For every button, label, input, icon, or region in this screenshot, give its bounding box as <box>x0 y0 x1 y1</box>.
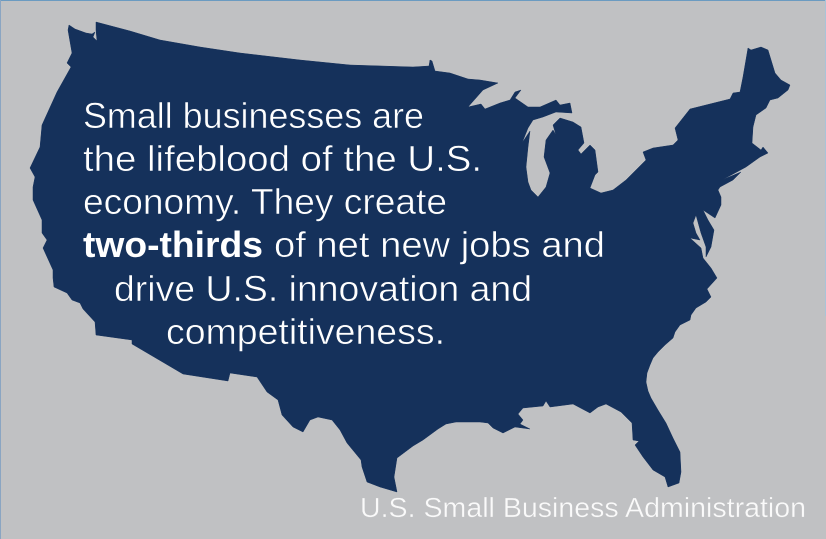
text block: main statement: the lifeblood of the U.S. <box>83 138 482 179</box>
text block: main statement: economy. They create <box>83 181 447 222</box>
text block: main statement <box>83 95 605 352</box>
text block: main statement: competitiveness. <box>166 311 445 352</box>
text block: main statement: Small businesses are <box>83 95 424 136</box>
source credit: U.S. Small Business Administration <box>360 492 806 523</box>
text block: main statement: two-thirds <box>83 224 263 265</box>
text block: main statement: of net new jobs and <box>274 224 605 265</box>
text block: main statement: drive U.S. innovation and <box>114 268 532 309</box>
